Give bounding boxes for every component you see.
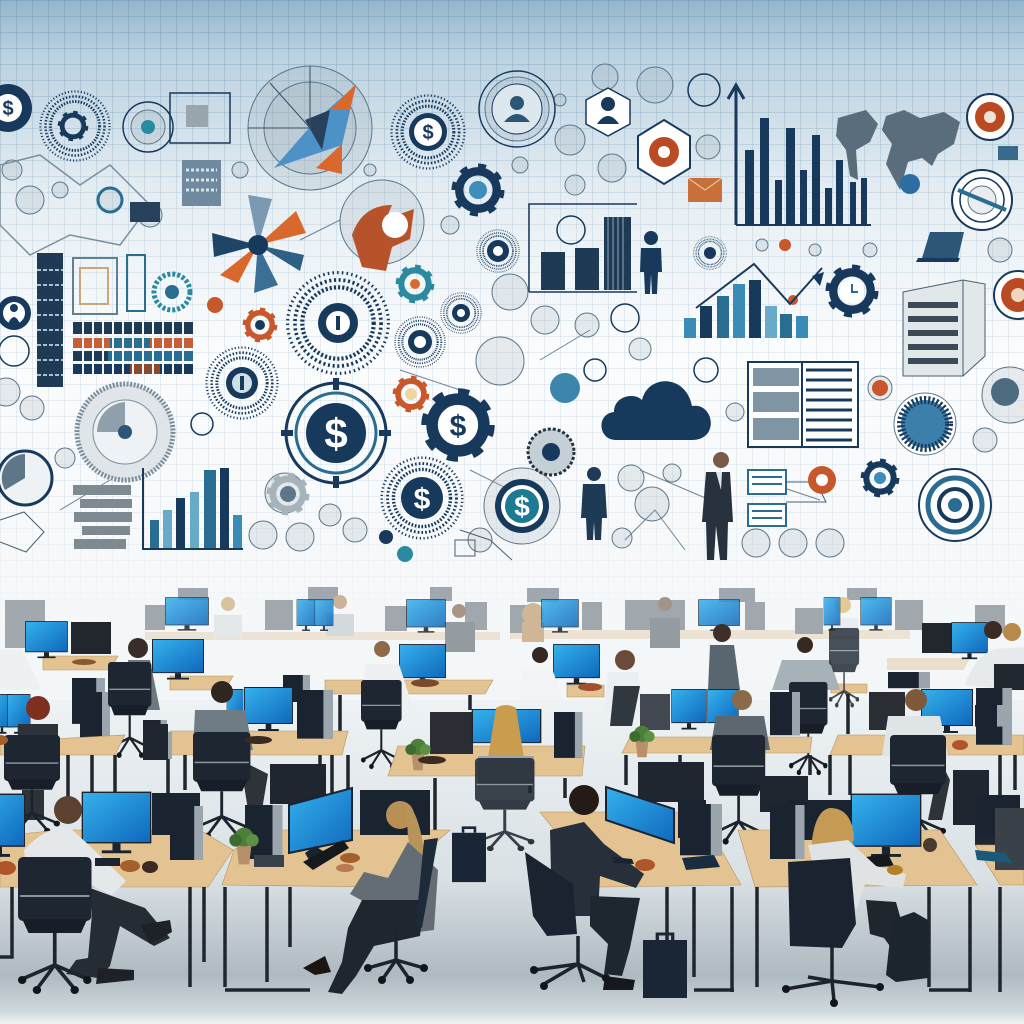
office floor <box>0 700 1024 1024</box>
icon: dollar gear <box>426 393 490 457</box>
third row monitors and towers <box>0 687 1012 770</box>
person: left edge white shirt <box>0 650 42 690</box>
person: rear gray man right <box>710 690 770 845</box>
icon: dollar badge lower: $ <box>514 491 530 522</box>
icon: dotted dollar top: $ <box>422 122 434 144</box>
person: front woman in patterned top <box>782 808 928 1007</box>
bag: front briefcase <box>643 934 687 998</box>
person: red hair woman <box>4 696 60 834</box>
desk items: food and keyboards <box>0 659 968 875</box>
grid pattern <box>0 0 1024 620</box>
icon: sketched network left <box>0 155 160 255</box>
icon: gray gear ring <box>528 429 574 475</box>
person: standing man <box>708 624 740 690</box>
background wall <box>0 0 1024 700</box>
icon: outlined badge <box>123 102 173 152</box>
icon: spiral target <box>919 469 991 541</box>
person: gray suit man <box>772 637 840 775</box>
chart: heatmap blocks <box>73 320 193 376</box>
icon: large dollar target: $ <box>324 410 348 457</box>
icon: dollar gear: $ <box>450 410 467 443</box>
icon: orange badge right edge <box>994 271 1024 319</box>
icon: envelope <box>688 178 722 202</box>
icon: cloud <box>601 381 711 440</box>
icon: orange and navy fan <box>212 195 306 293</box>
chart: building comparison <box>529 204 637 292</box>
icon: gear with clock <box>829 268 875 314</box>
icon: dotted dollar top <box>392 96 464 168</box>
third row people and chairs <box>4 681 950 851</box>
icon: lower dial <box>269 475 307 513</box>
chart: navy rising bars <box>728 85 871 225</box>
person: front left man in white shirt <box>18 796 172 994</box>
icon: orange gear <box>245 310 275 340</box>
chart: outline panels <box>73 255 145 314</box>
icon: orange ring <box>340 180 424 271</box>
icon: dotted gear <box>40 91 110 161</box>
person: light shirt man <box>882 689 950 842</box>
chart: dark vertical table <box>37 253 63 387</box>
icon: businessman presenting <box>702 452 733 560</box>
icon: hexagon person <box>586 88 630 136</box>
icon: world map <box>836 110 960 190</box>
icon: dial left edge <box>0 378 1019 505</box>
icon: large dollar target <box>281 378 391 488</box>
icon: navy puzzle gear <box>863 461 897 495</box>
icon: standing silhouette <box>640 231 662 294</box>
icon: dotted dollar lower <box>382 458 462 538</box>
person: dark hair woman <box>108 638 160 758</box>
person: blonde woman <box>475 705 534 851</box>
icon: navy gear <box>455 167 501 213</box>
icon: blue textured circle <box>894 393 956 455</box>
icon: dollar badge left edge: $ <box>2 98 14 120</box>
person: gray shirt man <box>193 681 268 839</box>
chart: data table panel <box>748 362 858 447</box>
icon: person badges left edge <box>0 296 31 366</box>
icon: dollar badge left edge <box>0 84 32 132</box>
bags and floor equipment <box>143 724 1019 882</box>
chair: empty back <box>829 628 859 707</box>
icon: dotted rings centre <box>395 293 481 367</box>
icon: small orange gear <box>395 378 427 410</box>
panel: finance and technology icon wall <box>0 64 1024 562</box>
second row desks <box>43 656 1010 758</box>
person: white shirt man <box>361 641 413 769</box>
person: right pair <box>965 621 1024 691</box>
back row workstations <box>5 587 1005 652</box>
icon: device panel <box>182 160 221 206</box>
person: woman white top <box>604 650 644 726</box>
icon: orange badge top right <box>967 94 1018 160</box>
back row people <box>214 595 858 652</box>
icon: server rack <box>903 280 985 376</box>
person: front man in dark suit <box>525 785 644 990</box>
icon: large dotted circle <box>288 273 388 373</box>
icon: striped globe <box>900 170 1012 230</box>
chart: trend bars with arrow <box>684 264 824 338</box>
icon: gray target dial <box>77 384 173 480</box>
icon: small diagram panel <box>170 93 230 143</box>
person: front woman with ponytail <box>303 801 438 994</box>
icon: flow diagram right <box>748 466 836 526</box>
second row people and chairs <box>0 621 1024 775</box>
person: right back seated <box>520 647 562 698</box>
icon: stacked layers <box>73 485 132 549</box>
icon: orange hexagon <box>638 120 690 184</box>
icon: small dotted rings <box>477 230 726 272</box>
chart: pie with coloured wedges <box>248 66 372 190</box>
back row monitors <box>165 597 892 633</box>
second row monitors <box>25 621 988 685</box>
icon: teal dotted circle <box>154 274 190 310</box>
icon: teal gear <box>398 267 432 301</box>
third row desks <box>0 731 1024 833</box>
icon: business silhouette <box>581 467 607 540</box>
icon: dotted info ring <box>206 347 278 419</box>
icon: laptop <box>916 232 964 262</box>
icon: dollar badge lower <box>484 468 560 544</box>
scattered small nodes <box>0 64 1024 562</box>
chart: lower bar chart <box>143 468 243 549</box>
icon: lower left sketches <box>0 512 512 560</box>
front row desks <box>0 812 1024 992</box>
icon: dotted dollar lower: $ <box>414 483 431 516</box>
panel: office scene <box>0 587 1024 1007</box>
icon: person ring <box>479 71 555 147</box>
front row equipment <box>0 787 1024 870</box>
